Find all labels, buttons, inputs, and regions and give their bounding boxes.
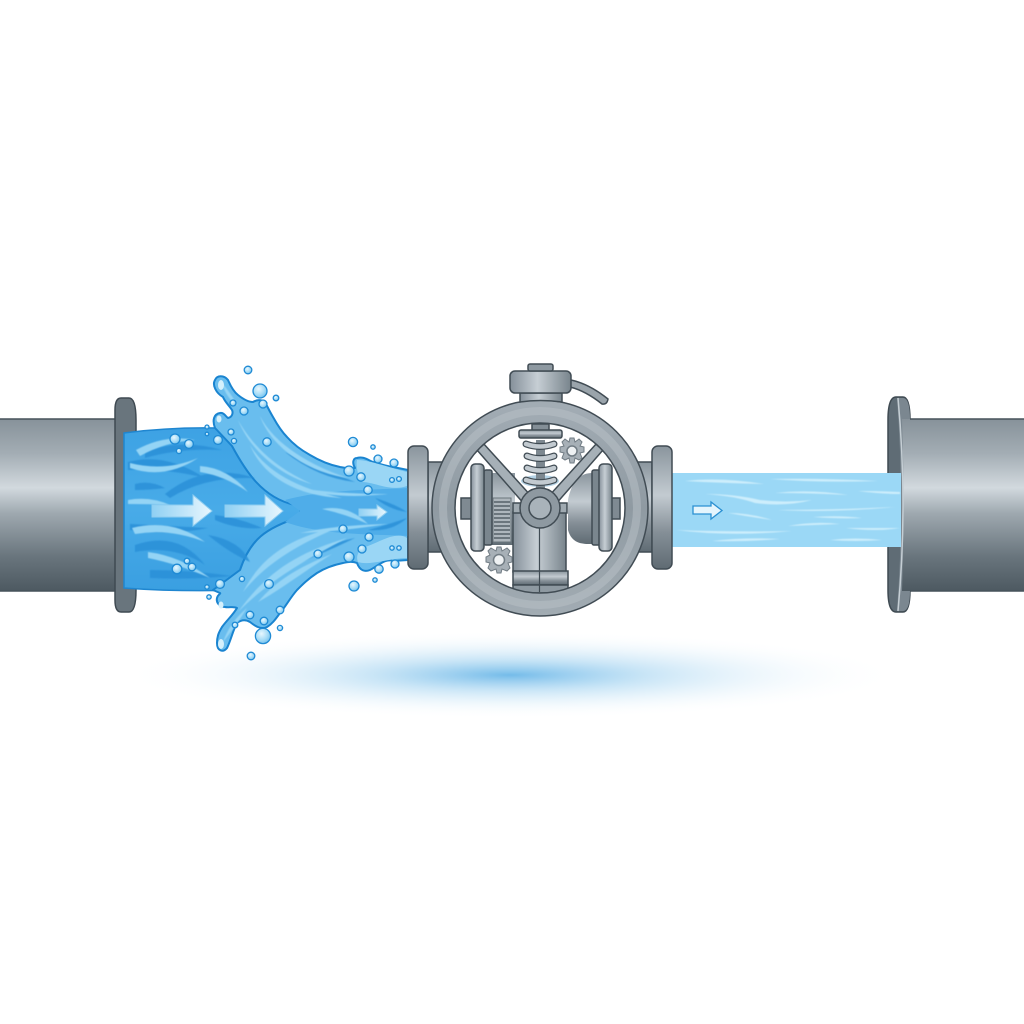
droplets [170, 366, 401, 660]
right pipe body [902, 419, 1024, 591]
flow arrow 3 [359, 505, 387, 520]
left connector [428, 462, 446, 552]
left valve flange [408, 446, 428, 569]
gear top right [560, 438, 584, 463]
outer ring [432, 400, 648, 616]
spokes [477, 443, 603, 513]
flow arrow 4 [693, 502, 722, 519]
water body inside left pipe [124, 428, 300, 591]
column centre line [538, 528, 540, 592]
right valve flange [652, 446, 672, 569]
right pipe [888, 397, 1024, 612]
dark wave patches [128, 444, 407, 579]
splash outline and lobes [213, 376, 408, 651]
valve [408, 364, 672, 616]
turbulent water [124, 366, 408, 660]
stream highlight lines [676, 479, 900, 541]
top bonnet [510, 364, 608, 404]
right flange front [897, 398, 910, 611]
light wave patches [128, 383, 388, 642]
left pipe flange [115, 398, 136, 612]
flow arrow 1 [152, 495, 212, 526]
ground shadow [120, 631, 900, 719]
centre hub [520, 488, 560, 528]
left pipe [0, 398, 136, 612]
central column [513, 512, 568, 593]
right piston [568, 464, 612, 551]
left compression spring [493, 498, 511, 542]
left piston [471, 464, 515, 551]
centre stream [285, 488, 408, 536]
gear bottom left [486, 547, 512, 573]
ring highlight [443, 411, 637, 605]
inner right stem [611, 498, 620, 519]
inner left stem [461, 498, 472, 519]
right connector [636, 462, 652, 552]
pale foam near the valve [357, 460, 407, 563]
right pipe flange [888, 397, 910, 612]
top spring [519, 424, 562, 490]
calm water stream [672, 473, 901, 547]
splash tip highlights [216, 380, 224, 649]
flow arrow 2 [225, 495, 283, 526]
